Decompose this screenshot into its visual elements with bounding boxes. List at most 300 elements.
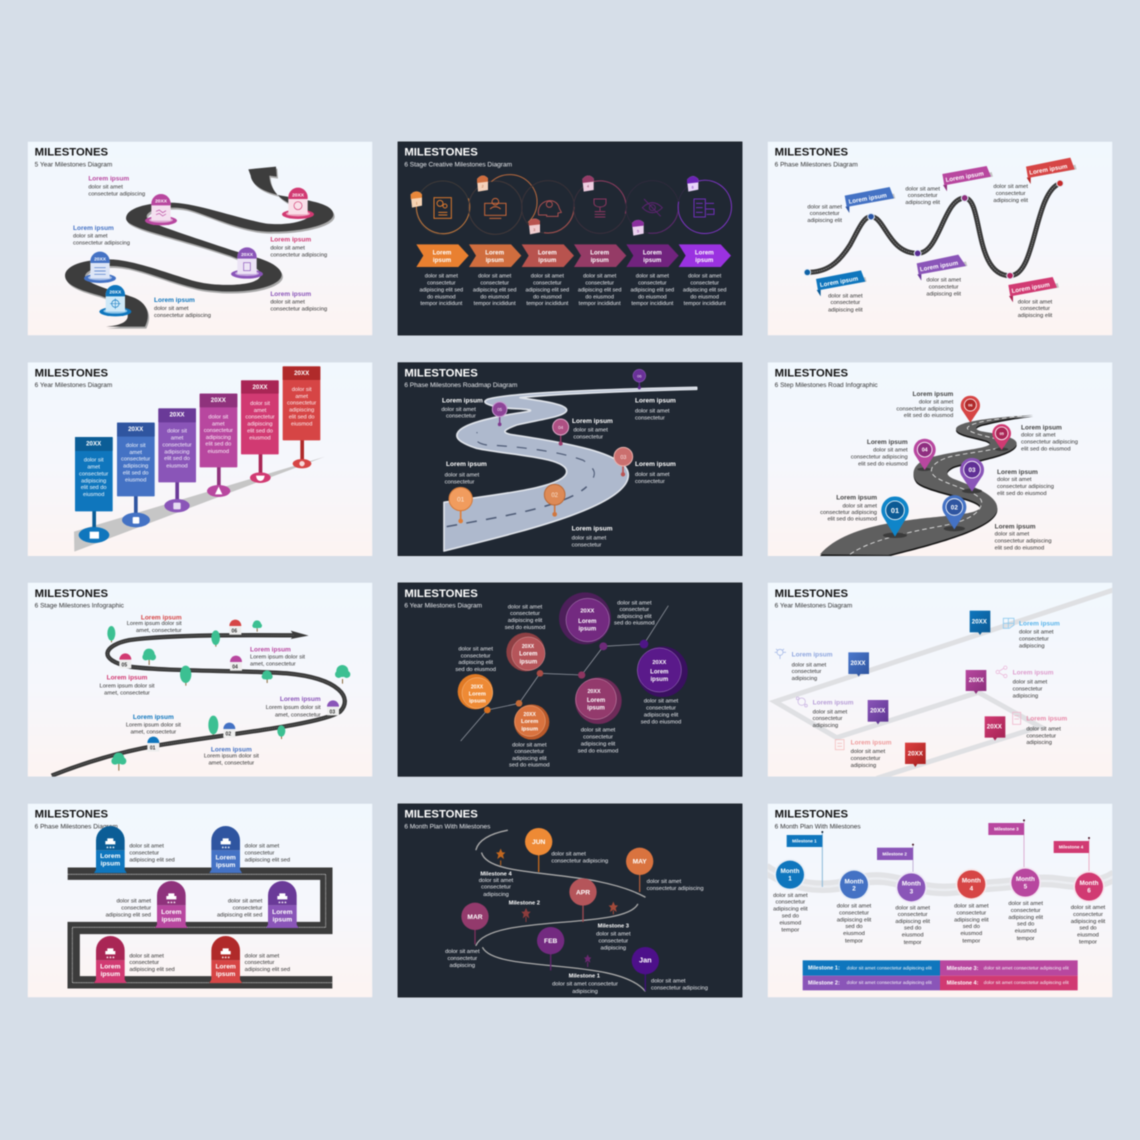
stage badges: 3 xyxy=(533,228,535,232)
circle 2: Lorem xyxy=(521,719,538,725)
milestone legend table: Milestone 3: xyxy=(947,966,979,972)
step labels: elit sed do eiusmod xyxy=(1021,446,1071,452)
step labels: dolor sit amet xyxy=(1021,432,1056,438)
gate 4: ★★★ xyxy=(278,901,287,905)
label royal blue: Lorem ipsum xyxy=(73,225,114,232)
stage descriptions: dolor sit amet xyxy=(531,274,564,280)
road labels: Lorem ipsum xyxy=(572,526,613,533)
square marker blue: 20XX xyxy=(972,618,988,625)
phase descriptions: adipiscing elit sed xyxy=(129,857,175,863)
month descriptions: adipiscing elit xyxy=(773,907,808,913)
flag 3 xyxy=(988,819,1025,870)
panel: 6 step road infographic xyxy=(768,362,1112,557)
heading: MILESTONES xyxy=(35,588,109,600)
gate 5 xyxy=(94,936,127,983)
circle 4: 20XX xyxy=(587,689,601,695)
flag: royal blue xyxy=(845,187,895,213)
pin 05 xyxy=(992,424,1011,450)
pin 05: 05 xyxy=(497,407,503,412)
square marker purple: 20XX xyxy=(870,708,886,715)
step labels: elit sed do eiusmod xyxy=(995,545,1044,551)
road labels: Lorem ipsum xyxy=(572,418,613,425)
circle 1: Lorem xyxy=(469,691,486,697)
gate 6 xyxy=(209,936,242,983)
phase descriptions: dolor sit amet xyxy=(129,844,164,850)
pin 04 xyxy=(914,439,936,470)
flag 3: Milestone 3 xyxy=(994,827,1019,832)
heading: MILESTONES xyxy=(404,147,478,159)
phase descriptions xyxy=(106,844,290,973)
pin 05 xyxy=(492,402,507,426)
year labels: dolor sit amet xyxy=(792,662,827,668)
month 5: Month xyxy=(1016,876,1035,883)
label purple: Lorem ipsum xyxy=(270,291,311,298)
month FEB xyxy=(537,927,564,954)
winding road with arrow xyxy=(65,167,335,329)
phase descriptions: adipiscing elit xyxy=(807,218,842,224)
station 03: 03 xyxy=(330,709,335,715)
subtitle: 6 Phase Milestones Diagram xyxy=(35,823,118,830)
square marker royal blue: 20XX xyxy=(850,660,866,667)
sign post 2: amet xyxy=(129,450,142,456)
sign post 1: consectetur xyxy=(79,471,108,477)
faded icons xyxy=(775,618,1021,750)
pin 03: 03 xyxy=(620,455,626,461)
month JUN xyxy=(525,828,552,855)
step labels: Lorem ipsum xyxy=(913,391,954,398)
month descriptions: dolor sit amet xyxy=(954,904,989,910)
month 6 xyxy=(1073,871,1105,902)
month MAY: MAY xyxy=(633,859,647,866)
stage descriptions: consectetur xyxy=(690,280,719,286)
sign post 5: amet xyxy=(254,408,267,414)
milestone and month text: consectetur adipiscing xyxy=(647,886,704,892)
phase descriptions xyxy=(807,184,1053,319)
circle 3: Lorem xyxy=(519,652,538,658)
step labels: consectetur adipiscing xyxy=(995,538,1052,544)
stage descriptions: dolor sit amet xyxy=(688,274,722,280)
star markers xyxy=(496,849,618,967)
step labels: Lorem ipsum xyxy=(997,469,1038,476)
flag: pink: Lorem ipsum xyxy=(1011,281,1051,295)
circle descriptions: dolor sit amet xyxy=(512,742,547,748)
stage descriptions: consectetur xyxy=(480,280,509,286)
station 04 xyxy=(230,656,242,671)
pin 06: 06 xyxy=(968,403,973,408)
road labels: dolor sit amet xyxy=(441,407,476,413)
step labels xyxy=(820,391,1078,551)
heading: MILESTONES xyxy=(775,588,849,600)
circle 6: Lorem xyxy=(650,669,669,675)
circle descriptions: adipiscing elit xyxy=(458,660,493,666)
stage chevron 2: Lorem xyxy=(485,249,505,256)
sign post 6: dolor sit xyxy=(292,387,312,393)
label blue: consectetur adipiscing xyxy=(154,313,211,319)
flag: magenta xyxy=(942,166,993,191)
phase descriptions: dolor sit amet xyxy=(905,186,940,192)
label royal blue xyxy=(73,225,130,247)
label pink xyxy=(270,237,327,258)
stage descriptions: adipiscing elit sed xyxy=(683,287,726,293)
phase descriptions: adipiscing elit xyxy=(1018,313,1053,319)
station labels: Lorem ipsum dolor sit xyxy=(250,654,305,660)
road labels: consectetur xyxy=(573,434,603,440)
heading: MILESTONES xyxy=(35,367,109,379)
label royal blue: dolor sit amet xyxy=(73,234,108,240)
phase descriptions: dolor sit amet xyxy=(828,293,863,299)
label purple xyxy=(270,291,327,313)
step labels: Lorem ipsum xyxy=(995,523,1036,530)
milestone and month text: adipiscing xyxy=(450,963,475,969)
phase descriptions: consectetur xyxy=(929,284,959,290)
month descriptions: consectetur xyxy=(1073,912,1103,918)
subtitle: 6 Phase Milestones Diagram xyxy=(775,161,858,168)
month descriptions: sed do xyxy=(1017,922,1034,928)
panel background xyxy=(768,583,1112,777)
month descriptions: sed do xyxy=(845,924,863,930)
subtitle: 6 Year Milestones Diagram xyxy=(775,603,852,610)
label magenta: consectetur adipiscing xyxy=(88,191,145,197)
panel background xyxy=(398,583,742,777)
square marker royal blue xyxy=(848,652,869,677)
pin 01 xyxy=(449,487,472,523)
phase descriptions: adipiscing elit sed xyxy=(129,967,175,973)
gate 1: ★★★ xyxy=(106,846,115,850)
circle 5: ipsum xyxy=(579,627,596,633)
subtitle: 6 Stage Milestones Infographic xyxy=(35,603,125,610)
step labels: elit sed do eiusmod xyxy=(997,491,1047,497)
phase descriptions: dolor sit amet xyxy=(807,204,842,210)
stage descriptions xyxy=(420,274,726,307)
sign post 6: eiusmod xyxy=(291,422,312,428)
station labels: Lorem ipsum xyxy=(107,674,148,681)
sign post 4: amet xyxy=(212,421,225,427)
flag: purple: Lorem ipsum xyxy=(919,260,959,273)
flag: blue: Lorem ipsum xyxy=(819,275,859,289)
stage chevron 3 xyxy=(522,244,574,267)
month descriptions xyxy=(773,893,1106,946)
road labels xyxy=(441,397,676,549)
year labels: dolor sit amet xyxy=(1019,630,1054,636)
gate 5: Lorem xyxy=(100,963,121,970)
sign post 3 xyxy=(158,408,196,512)
road labels: Lorem ipsum xyxy=(442,397,483,404)
month descriptions: adipiscing elit xyxy=(837,917,872,923)
milestone and month text: Milestone 2 xyxy=(509,901,540,907)
circle 1: ipsum xyxy=(469,698,486,704)
station labels: amet, consectetur xyxy=(275,712,321,718)
pin 02: 02 xyxy=(951,504,958,511)
sign post 2: eiusmod xyxy=(125,478,146,484)
road nodes xyxy=(804,180,1063,279)
phase descriptions: adipiscing elit sed xyxy=(217,912,262,918)
sign post 1: 20XX xyxy=(86,441,102,448)
gate 1: Lorem xyxy=(100,853,121,860)
sign post 4: adipiscing xyxy=(206,435,231,441)
flag: royal blue: Lorem ipsum xyxy=(848,192,888,206)
diagonal grey road xyxy=(74,457,325,552)
road labels: dolor sit amet xyxy=(635,409,670,415)
year labels: adipiscing xyxy=(813,723,838,729)
road labels: consectetur xyxy=(445,479,474,485)
stage badges xyxy=(411,175,698,236)
phase descriptions: consectetur xyxy=(908,193,938,199)
phase descriptions: consectetur xyxy=(121,905,151,911)
sign post 6: 20XX xyxy=(294,370,310,377)
sign post 1: dolor sit xyxy=(84,458,104,464)
winding road xyxy=(820,415,1033,557)
month descriptions: tempor xyxy=(1079,940,1097,946)
phase descriptions: dolor sit amet xyxy=(926,278,961,284)
marker: 20XX magenta xyxy=(145,194,177,225)
milestone and month text: consectetur adipiscing xyxy=(551,859,608,865)
tree group xyxy=(107,620,350,771)
label purple: consectetur adipiscing xyxy=(270,307,327,313)
flag 1 xyxy=(787,831,823,887)
station labels: Lorem ipsum xyxy=(250,647,291,654)
year labels xyxy=(792,621,1067,769)
stage descriptions: adipiscing elit sed xyxy=(526,287,569,293)
marker: 20XX blue: 20XX xyxy=(109,290,122,296)
gate 3: ipsum xyxy=(162,917,181,924)
station 06: 06 xyxy=(232,629,237,635)
year labels: adipiscing xyxy=(1013,694,1038,700)
stage badges: 6 xyxy=(692,185,694,189)
stage descriptions: tempor incididunt xyxy=(526,301,569,307)
station labels: Lorem ipsum dolor sit xyxy=(100,684,155,690)
month JUN: JUN xyxy=(532,839,546,846)
panel background xyxy=(398,804,742,997)
sign post 1: elit sed do xyxy=(81,485,107,491)
step labels: consectetur adipiscing xyxy=(1021,439,1078,445)
month Jan: Jan xyxy=(639,955,652,964)
stage chevron 4 xyxy=(574,244,626,267)
pin 03 xyxy=(960,458,984,492)
circle 6 xyxy=(637,646,688,697)
gate 6: Lorem xyxy=(216,963,236,970)
stage chevron 5: ipsum xyxy=(643,257,662,264)
month descriptions: eiusmod xyxy=(902,933,924,939)
phase descriptions: dolor sit amet xyxy=(993,184,1028,190)
curved road segments xyxy=(476,830,645,991)
label blue: Lorem ipsum xyxy=(154,297,195,304)
heading: MILESTONES xyxy=(775,809,849,821)
gate 4: Lorem xyxy=(272,909,293,916)
step labels: consectetur adipiscing xyxy=(997,484,1054,490)
flag 2 xyxy=(877,844,914,874)
month descriptions: eiusmod xyxy=(1015,929,1037,935)
circle descriptions: sed do eiusmod xyxy=(614,621,655,627)
label pink: consectetur adipiscing xyxy=(270,252,327,258)
panel background xyxy=(28,583,372,777)
sign post 2: elit sed do xyxy=(123,470,149,476)
stage descriptions: dolor sit amet xyxy=(583,274,617,280)
milestone legend table: Milestone 4: xyxy=(947,980,979,986)
label pink: dolor sit amet xyxy=(270,245,305,251)
month 5 xyxy=(1010,867,1041,898)
station labels: Lorem ipsum dolor sit xyxy=(126,723,181,729)
stage chevron 2: ipsum xyxy=(486,257,504,264)
stage chevron 4: ipsum xyxy=(591,257,609,264)
milestone legend table: Milestone 1: xyxy=(808,965,840,971)
gate 6: ipsum xyxy=(216,971,236,978)
milestone and month text: adipiscing xyxy=(601,945,626,951)
month MAR: MAR xyxy=(467,914,483,921)
month descriptions: consectetur xyxy=(956,910,986,916)
sign post 6: consectetur xyxy=(287,401,316,407)
station labels: Lorem ipsum dolor sit xyxy=(127,621,182,627)
circle descriptions: dolor sit amet xyxy=(508,604,543,610)
station 04: 04 xyxy=(232,664,238,670)
month descriptions: dolor sit amet xyxy=(1008,901,1043,907)
station 05: 05 xyxy=(122,662,127,668)
station labels: amet, consectetur xyxy=(136,628,182,634)
circle 3: 20XX xyxy=(522,644,535,650)
month 6: 6 xyxy=(1087,888,1091,895)
sign post 6 xyxy=(283,366,320,468)
heading: MILESTONES xyxy=(404,809,478,821)
phase descriptions: consectetur xyxy=(830,300,860,306)
stage descriptions: tempor incididunt xyxy=(579,301,621,307)
circle 2: ipsum xyxy=(521,726,538,732)
panel: 6 year zigzag road xyxy=(768,582,1112,777)
circle descriptions: adipiscing elit xyxy=(512,756,547,762)
circle descriptions: consectetur xyxy=(583,734,613,740)
sign post 5: consectetur xyxy=(245,415,275,421)
circle 3: ipsum xyxy=(520,660,537,666)
year labels: consectetur xyxy=(1013,687,1042,693)
month 2: 2 xyxy=(852,886,856,893)
station labels: Lorem ipsum dolor sit xyxy=(204,754,259,760)
stage descriptions: adipiscing elit sed xyxy=(420,287,463,293)
connecting line with nodes xyxy=(461,606,668,741)
panel background xyxy=(768,804,1112,997)
marker: 20XX pink xyxy=(282,188,314,219)
milestone and month text xyxy=(445,852,708,995)
circle 2: 20XX xyxy=(524,712,536,718)
sign post 3: adipiscing xyxy=(164,449,190,455)
month 6: Month xyxy=(1080,880,1099,887)
pin 01 xyxy=(881,496,909,537)
milestone and month text: dolor sit amet xyxy=(647,879,682,885)
road labels: Lorem ipsum xyxy=(635,397,676,404)
milestone and month text: dolor sit amet xyxy=(445,949,480,955)
step labels: dolor sit amet xyxy=(842,503,877,509)
month descriptions: eiusmod xyxy=(1077,933,1099,939)
stage badges: 1 xyxy=(416,201,418,205)
stage descriptions: tempor incididunt xyxy=(631,301,674,307)
step labels: consectetur adipiscing xyxy=(896,407,953,413)
sign post 5: dolor sit xyxy=(250,401,270,407)
month descriptions: tempor xyxy=(1017,936,1035,942)
stage badges: 2 xyxy=(482,185,484,189)
square marker magenta: 20XX xyxy=(969,677,985,684)
circle descriptions: adipiscing elit xyxy=(508,618,543,624)
panel: 6 stage creative milestones xyxy=(396,140,744,336)
square marker pink: 20XX xyxy=(987,724,1003,731)
month descriptions: adipiscing elit xyxy=(954,917,989,923)
gate 4 xyxy=(266,881,299,928)
year labels: Lorem ipsum xyxy=(1026,716,1067,723)
year labels: Lorem ipsum xyxy=(1013,669,1054,676)
phase descriptions: dolor sit amet xyxy=(1018,299,1053,305)
stage descriptions: adipiscing elit sed xyxy=(473,287,516,293)
station labels xyxy=(100,614,321,767)
road with arrow xyxy=(52,631,345,776)
month 2: Month xyxy=(845,878,864,885)
gate 3: Lorem xyxy=(161,909,182,916)
pin 01: 01 xyxy=(891,506,899,515)
milestone legend table xyxy=(803,960,1078,990)
station labels: Lorem ipsum dolor sit xyxy=(266,705,321,711)
milestone and month text: dolor sit amet xyxy=(479,878,514,884)
month 3: 3 xyxy=(910,889,914,896)
stage descriptions: consectetur xyxy=(585,280,614,286)
subtitle: 6 Month Plan With Milestones xyxy=(404,823,491,830)
gate 1 xyxy=(94,826,127,873)
stage descriptions: consectetur xyxy=(427,280,456,286)
month 2 xyxy=(838,869,870,900)
pin 04: 04 xyxy=(558,425,564,430)
phase descriptions: dolor sit amet xyxy=(116,899,151,905)
month 4: 4 xyxy=(970,885,974,892)
pin 03 xyxy=(614,447,633,476)
month descriptions: dolor sit amet xyxy=(1071,905,1106,911)
stage descriptions: adipiscing elit sed xyxy=(578,287,621,293)
label pink: Lorem ipsum xyxy=(270,237,311,244)
circle descriptions: sed do eiusmod xyxy=(455,667,496,673)
circle descriptions: dolor sit amet xyxy=(581,728,616,734)
station labels: amet, consectetur xyxy=(250,661,296,667)
month 1: Month xyxy=(781,868,800,875)
stage descriptions: do eiusmod xyxy=(427,294,456,300)
sign post 4 xyxy=(200,394,237,497)
station labels: amet, consectetur xyxy=(208,761,254,767)
year labels: Lorem ipsum xyxy=(1019,621,1060,628)
flag: red: Lorem ipsum xyxy=(1029,163,1069,177)
sign post 2: dolor sit xyxy=(126,443,146,449)
milestone and month text: dolor sit amet xyxy=(551,852,586,858)
gate 2: ★★★ xyxy=(221,846,230,850)
phase descriptions: consectetur xyxy=(810,211,840,217)
sign post 5: elit sed do xyxy=(247,428,273,434)
flag 4: Milestone 4 xyxy=(1059,845,1084,850)
label magenta xyxy=(88,176,145,197)
month 5: 5 xyxy=(1024,884,1028,891)
step labels: elit sed do eiusmod xyxy=(858,461,908,467)
station 02: 02 xyxy=(226,732,231,738)
circle descriptions: sed do eiusmod xyxy=(641,719,681,725)
step labels: Lorem ipsum xyxy=(1021,424,1062,431)
station labels: Lorem ipsum xyxy=(141,614,182,621)
milestone and month text: consectetur xyxy=(447,956,477,962)
circle descriptions: adipiscing elit xyxy=(581,742,616,748)
gate 2: ipsum xyxy=(216,862,236,869)
stage badges: 5 xyxy=(637,229,639,233)
phase descriptions: adipiscing elit sed xyxy=(106,912,151,918)
month descriptions: dolor sit amet xyxy=(773,893,808,899)
stage descriptions: tempor incididunt xyxy=(684,301,726,307)
station 01 xyxy=(147,737,159,752)
station labels: amet, consectetur xyxy=(130,730,176,736)
step labels: elit sed do eiusmod xyxy=(904,413,953,419)
stage icons xyxy=(434,198,714,218)
panel: 5 year winding road xyxy=(28,142,372,336)
flag 1: Milestone 1 xyxy=(792,838,817,843)
sign post 4: dolor sit xyxy=(208,414,229,420)
pin 02 xyxy=(942,495,966,529)
heading: MILESTONES xyxy=(35,147,109,159)
